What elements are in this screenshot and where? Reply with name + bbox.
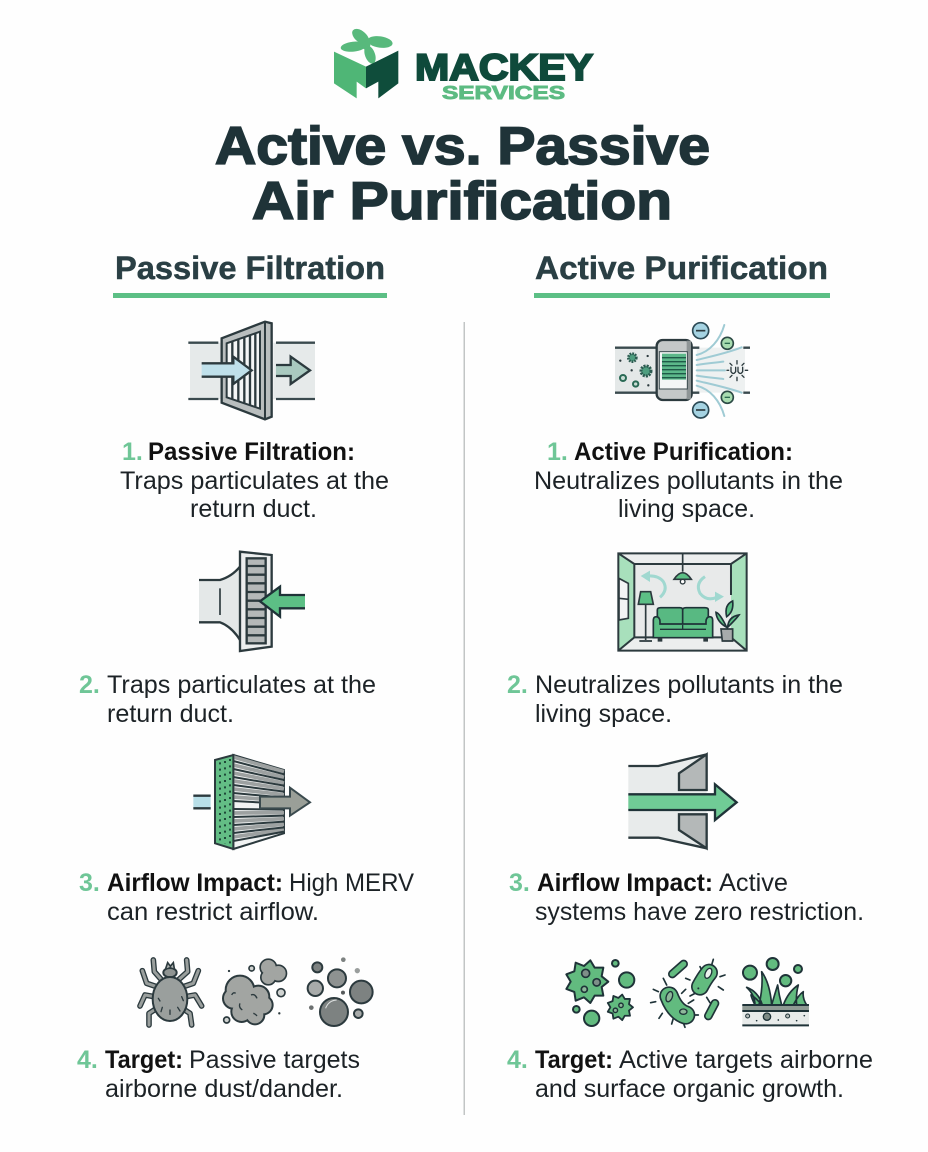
icon: particles <box>308 957 373 1026</box>
text: active point 1: living space. <box>618 495 755 523</box>
icon: bacteria <box>651 959 725 1027</box>
icon: living room <box>618 553 747 651</box>
text: passive point 4: Passive targets <box>189 1046 360 1074</box>
logo: Mackey Services <box>334 26 593 103</box>
icon: spores <box>566 960 634 1026</box>
text: passive point 2: Traps particulates at the <box>107 671 376 699</box>
text: passive point 4: airborne dust/dander. <box>105 1075 343 1103</box>
logo subtitle: SERVICES <box>442 83 565 103</box>
icon: surface growth <box>742 958 809 1025</box>
icon: active purifier with ions <box>615 323 750 418</box>
text: active point 3: Active <box>719 869 788 897</box>
text: passive point 3: 3. <box>79 869 100 897</box>
text: passive point 2: return duct. <box>107 700 234 728</box>
text: active point 4 <box>507 1046 873 1103</box>
text: active point 2: 2. <box>507 671 528 699</box>
icon group: passive targets <box>140 957 373 1026</box>
text: passive point 4: 4. <box>77 1046 98 1074</box>
title <box>215 117 710 231</box>
text: active point 3: 3. <box>509 869 530 897</box>
text: passive point 4 <box>77 1046 360 1103</box>
icon: pleated high-MERV filter <box>193 755 310 849</box>
text: active point 1: Active Purification: <box>574 438 793 466</box>
text: active point 4: Target: <box>535 1046 613 1074</box>
text: active point 3: systems have zero restriction. <box>535 898 864 926</box>
text: passive point 2 <box>79 671 376 728</box>
text: active point 4: Active targets airborne <box>619 1046 873 1074</box>
text: passive point 1 <box>120 438 389 523</box>
text: active point 1: 1. <box>547 438 568 466</box>
icon: passive filter in duct <box>188 322 315 419</box>
icon: unrestricted airflow duct <box>628 754 737 848</box>
text: passive point 4: Target: <box>105 1046 183 1074</box>
text: active point 2 <box>507 671 843 728</box>
icon: return duct filter <box>199 552 305 651</box>
text: active point 1 <box>534 438 843 523</box>
title: Air Purification <box>252 172 672 231</box>
text: active point 3: Airflow Impact: <box>537 869 713 897</box>
text: passive point 3: Airflow Impact: <box>107 869 283 897</box>
text: active point 1: Neutralizes pollutants in the <box>534 467 843 495</box>
heading: Passive Filtration: Passive Filtration <box>115 250 385 286</box>
text: passive point 3: High MERV <box>289 869 414 897</box>
text: passive point 1: return duct. <box>190 495 317 523</box>
text: passive point 1: Passive Filtration: <box>148 438 355 466</box>
icon: dust cloud <box>224 960 286 1023</box>
icon: dust mite <box>140 960 202 1025</box>
icon group: active targets <box>566 958 809 1027</box>
text: active point 2: Neutralizes pollutants in the <box>535 671 843 699</box>
logo wordmark: MACKEY <box>415 47 593 88</box>
icon: fan cube <box>334 26 398 98</box>
text: passive point 2: 2. <box>79 671 100 699</box>
text: passive point 3: can restrict airflow. <box>107 898 319 926</box>
text: active point 4: and surface organic growth. <box>535 1075 844 1103</box>
text: active point 4: 4. <box>507 1046 528 1074</box>
title: Active vs. Passive <box>215 117 710 176</box>
heading: Active Purification: Active Purification <box>535 250 828 286</box>
text: passive point 3 <box>79 869 414 926</box>
text: passive point 1: Traps particulates at the <box>120 467 389 495</box>
text: active point 2: living space. <box>535 700 672 728</box>
text: active point 3 <box>509 869 864 926</box>
text: passive point 1: 1. <box>122 438 143 466</box>
